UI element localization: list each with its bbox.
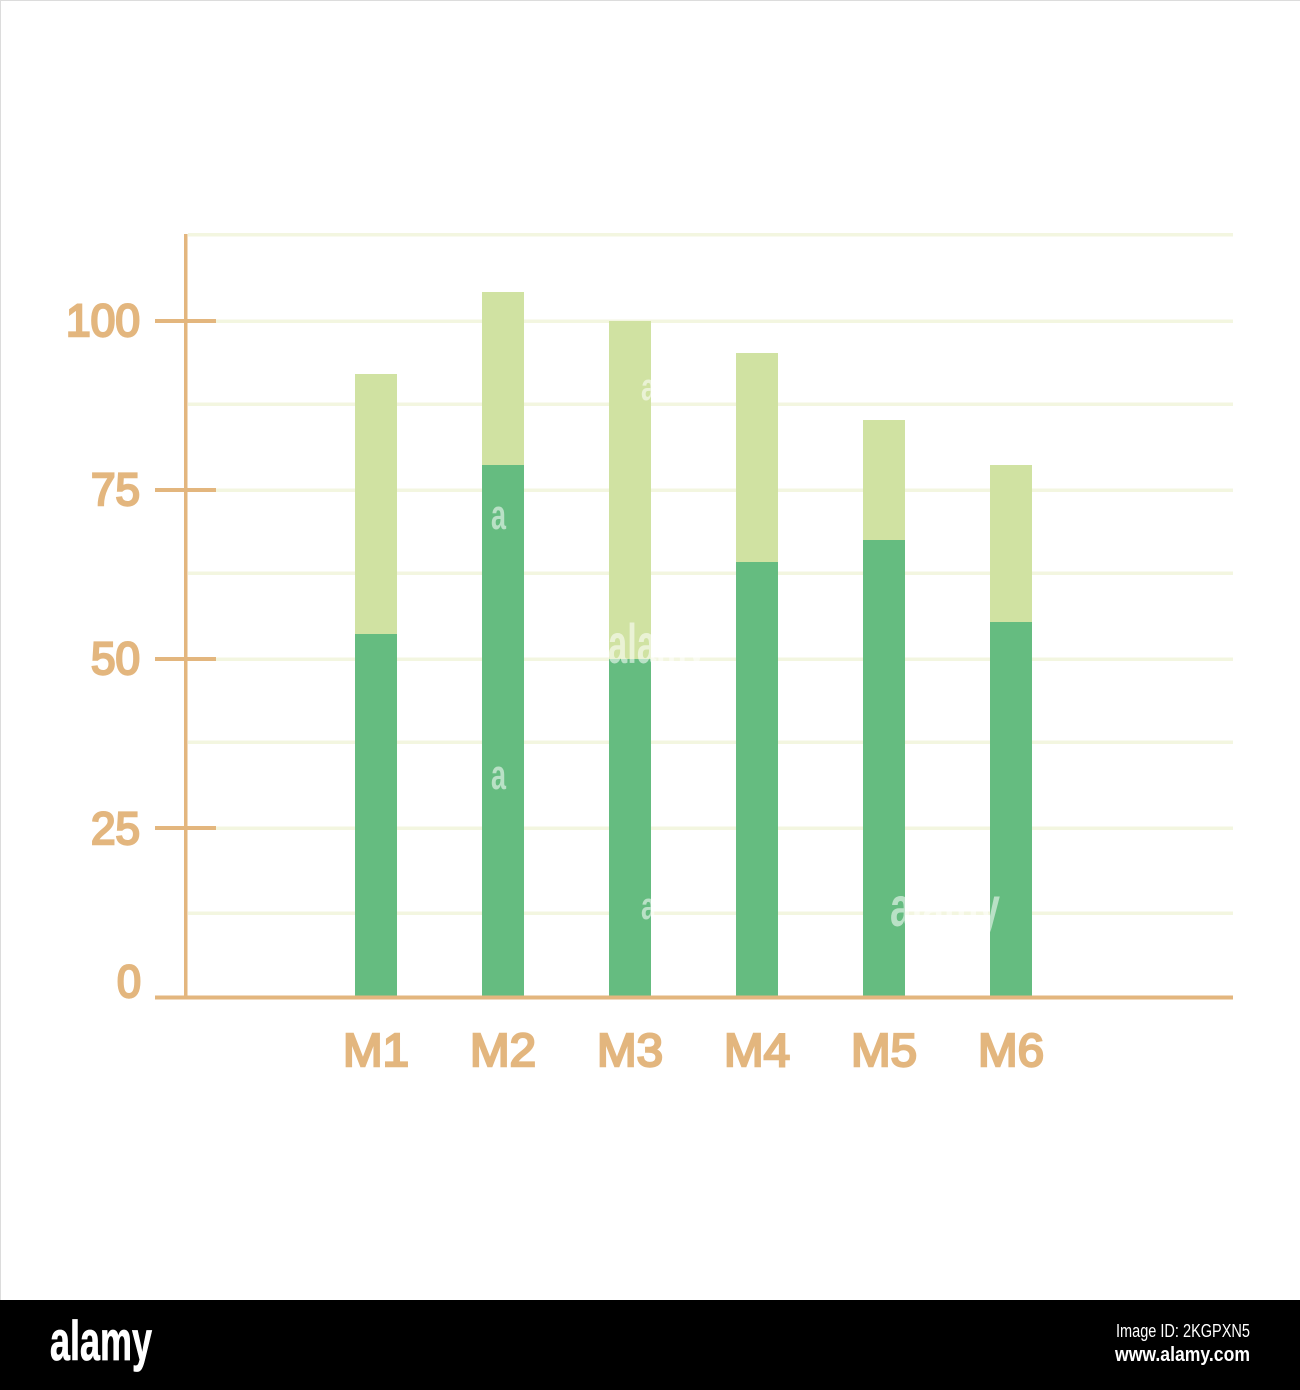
stacked bar chart — [355, 292, 1032, 997]
bar: M5 — [863, 420, 905, 997]
y axis with ticks — [155, 234, 216, 998]
x axis labels — [343, 1024, 1044, 1076]
footer logo: alamy — [50, 1309, 152, 1372]
watermark overlays: a — [641, 886, 657, 928]
y axis labels: 75 — [91, 464, 140, 515]
bar: M4 — [736, 353, 778, 997]
x axis labels: M1 — [343, 1024, 409, 1076]
watermark overlays: a — [641, 367, 657, 409]
watermark overlays: alamy — [608, 612, 706, 675]
x axis labels: M3 — [597, 1024, 663, 1076]
x axis labels: M4 — [724, 1024, 790, 1076]
y axis labels — [66, 295, 141, 1007]
gridlines — [188, 233, 1233, 915]
x axis labels: M2 — [470, 1024, 536, 1076]
bar: M1 — [355, 374, 397, 997]
x axis labels: M5 — [851, 1024, 917, 1076]
bar: M6 — [990, 465, 1032, 997]
x axis — [155, 996, 1233, 1000]
bar: M2 — [482, 292, 524, 997]
y axis labels: 25 — [91, 803, 140, 854]
footer bar — [0, 1300, 1300, 1390]
image id: Image ID: 2KGPXN5 — [1116, 1321, 1250, 1341]
y axis labels: 100 — [66, 295, 140, 346]
watermark overlays — [491, 367, 1000, 938]
x axis labels: M6 — [978, 1024, 1044, 1076]
watermark overlays: a — [491, 751, 506, 798]
y axis labels: 0 — [117, 956, 141, 1007]
watermark overlays: alamy — [890, 875, 1000, 938]
bar: M3 — [609, 321, 651, 997]
y axis labels: 50 — [91, 633, 140, 684]
watermark overlays: a — [491, 491, 506, 538]
website: www.alamy.com — [1114, 1344, 1250, 1366]
